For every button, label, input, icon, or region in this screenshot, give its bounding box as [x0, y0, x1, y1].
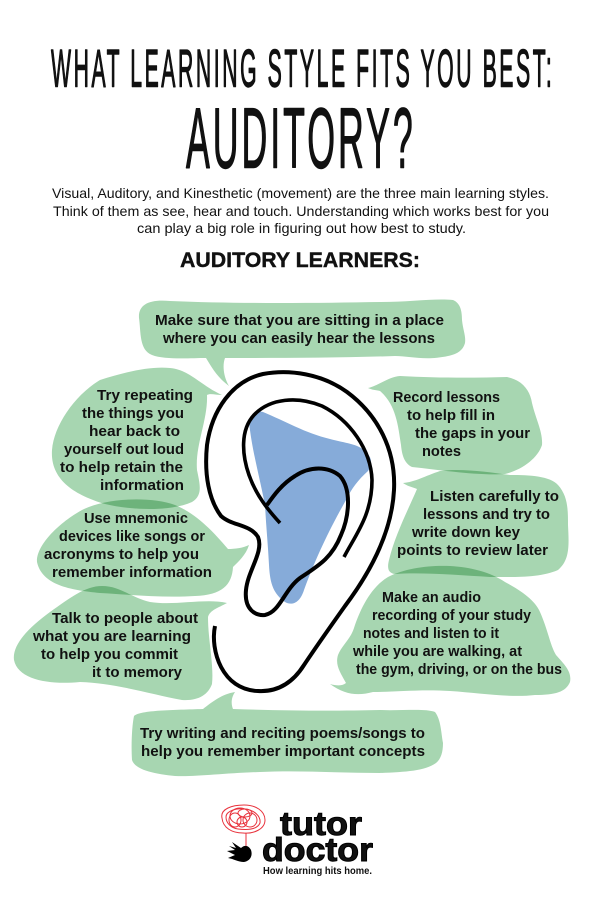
wordmark: tutor — [280, 805, 362, 842]
speech bubble: talk to people: to help you commit — [41, 647, 178, 663]
speech bubble: sitting place: Make sure that you are sitting in a place — [155, 313, 444, 329]
icon: black hand — [227, 842, 252, 862]
intro text — [52, 185, 549, 236]
title — [51, 38, 552, 186]
wordmark: How learning hits home. — [263, 865, 372, 877]
intro text: Visual, Auditory, and Kinesthetic (movement) are the three main learning styles. — [52, 185, 549, 201]
speech bubble: poems and songs — [132, 692, 443, 776]
speech bubble: record lessons: the gaps in your — [415, 426, 530, 442]
logo: Tutor Doctor — [222, 805, 373, 877]
blue ear shape — [249, 411, 371, 604]
speech bubble: listen carefully: Listen carefully to — [430, 489, 559, 505]
speech bubble: repeating: Try repeating — [97, 388, 193, 404]
speech bubble: poems and songs: help you remember important concepts — [141, 744, 425, 760]
speech bubble: audio recording: Make an audio — [382, 590, 481, 606]
icon: red brain scribble — [222, 805, 265, 846]
speech bubble: repeating: information — [100, 478, 184, 494]
speech bubble: record lessons: Record lessons — [393, 390, 500, 406]
speech bubble: talk to people — [14, 586, 227, 700]
speech bubble: repeating: hear back to — [89, 424, 180, 440]
wordmark — [262, 805, 373, 877]
intro text: can play a big role in figuring out how best to study. — [137, 220, 466, 236]
speech bubble: talk to people: what you are learning — [32, 629, 191, 645]
speech bubble: listen carefully: lessons and try to — [423, 507, 550, 523]
speech bubble: audio recording: notes and listen to it — [363, 626, 499, 642]
speech bubble: poems and songs: Try writing and reciting poems/songs to — [140, 726, 425, 742]
speech bubble: mnemonic: devices like songs or — [59, 529, 205, 545]
speech bubble: repeating: the things you — [82, 406, 184, 422]
title: WHAT LEARNING STYLE FITS YOU BEST: — [51, 38, 552, 98]
speech bubble: talk to people: it to memory — [92, 665, 182, 681]
title: AUDITORY? — [186, 91, 413, 186]
speech bubble: listen carefully — [388, 470, 569, 577]
speech bubble: listen carefully: write down key — [411, 525, 520, 541]
speech bubble: sitting place — [139, 299, 465, 386]
speech bubble: sitting place: where you can easily hear the lessons — [162, 331, 435, 347]
intro text: Think of them as see, hear and touch. Understanding which works best for you — [53, 203, 549, 219]
speech bubble: mnemonic: acronyms to help you — [44, 547, 199, 563]
speech bubble: mnemonic: remember information — [52, 565, 212, 581]
speech bubble: record lessons: to help fill in — [407, 408, 495, 424]
speech bubble: record lessons — [368, 376, 542, 474]
heading: AUDITORY LEARNERS: — [180, 249, 420, 272]
speech bubble: repeating — [52, 368, 222, 509]
wordmark: doctor — [262, 831, 373, 868]
speech bubble: mnemonic — [37, 499, 249, 597]
speech bubble: talk to people: Talk to people about — [52, 611, 198, 627]
speech bubble: mnemonic: Use mnemonic — [84, 511, 188, 527]
ear outline — [206, 372, 394, 691]
speech bubble: repeating: yourself out loud — [64, 442, 184, 458]
speech bubble: record lessons: notes — [422, 444, 461, 460]
speech bubble: listen carefully: points to review later — [397, 543, 548, 559]
speech bubble: audio recording — [330, 566, 570, 696]
speech bubble: repeating: to help retain the — [60, 460, 183, 476]
speech bubble: audio recording: the gym, driving, or on the bus — [356, 662, 562, 678]
speech bubble: audio recording: while you are walking, at — [352, 644, 522, 660]
speech bubble: audio recording: recording of your study — [372, 608, 531, 624]
